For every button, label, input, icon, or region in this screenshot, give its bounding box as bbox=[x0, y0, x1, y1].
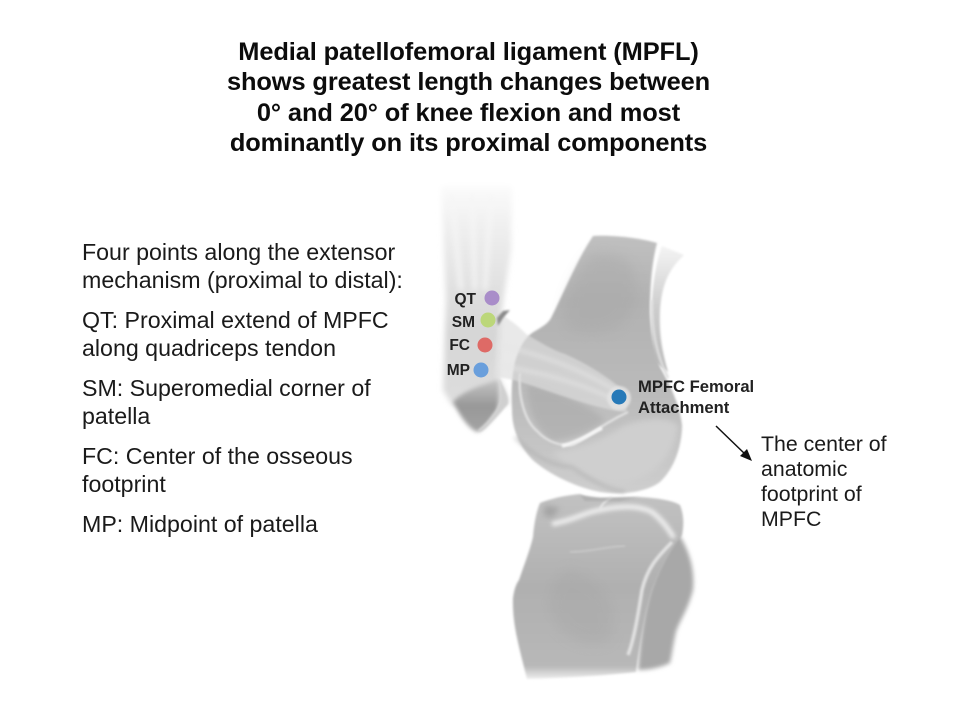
arrow bbox=[716, 426, 752, 461]
title: Medial patellofemoral ligament (MPFL) bbox=[238, 38, 699, 66]
point: femoral attachment bbox=[612, 390, 626, 404]
text: introduction: Four points along the extensor bbox=[82, 239, 395, 265]
title bbox=[227, 38, 710, 157]
text: footprint note: footprint of bbox=[761, 482, 862, 506]
text: FC definition: FC: Center of the osseous bbox=[82, 443, 353, 469]
point: SM bbox=[452, 312, 496, 331]
point: FC: FC bbox=[449, 337, 470, 354]
tibia bbox=[513, 494, 683, 679]
quadriceps tendon bbox=[441, 186, 512, 412]
patella bbox=[453, 376, 508, 432]
text: footprint note bbox=[761, 432, 887, 531]
text: introduction bbox=[82, 239, 403, 293]
text: MP definition: MP: Midpoint of patella bbox=[82, 511, 318, 537]
point: QT bbox=[454, 290, 500, 308]
femur bbox=[512, 236, 682, 493]
title: dominantly on its proximal components bbox=[230, 129, 707, 157]
text: SM definition: SM: Superomedial corner of bbox=[82, 375, 371, 401]
point: MP bbox=[447, 362, 488, 379]
text: QT definition: along quadriceps tendon bbox=[82, 335, 336, 361]
label: femoral attachment: Attachment bbox=[638, 398, 730, 417]
text: footprint note: anatomic bbox=[761, 457, 847, 481]
text: footprint note: The center of bbox=[761, 432, 886, 456]
point: MP: MP bbox=[447, 362, 470, 379]
text: SM definition bbox=[82, 375, 371, 429]
title: shows greatest length changes between bbox=[227, 68, 710, 96]
text: FC definition: footprint bbox=[82, 471, 166, 497]
text: footprint note: MPFC bbox=[761, 507, 821, 531]
text: QT definition bbox=[82, 307, 389, 361]
title: 0° and 20° of knee flexion and most bbox=[257, 99, 680, 127]
point: QT: QT bbox=[454, 291, 477, 308]
point: FC bbox=[449, 337, 492, 354]
posterior femoral strip bbox=[652, 246, 684, 372]
text: introduction: mechanism (proximal to distal): bbox=[82, 267, 403, 293]
medial patellofemoral ligament bbox=[495, 310, 631, 412]
text: FC definition bbox=[82, 443, 353, 497]
label: femoral attachment: MPFC Femoral bbox=[638, 377, 754, 396]
point: SM: SM bbox=[452, 314, 475, 331]
text: SM definition: patella bbox=[82, 403, 150, 429]
tibia fibular side bbox=[638, 530, 693, 670]
text: QT definition: QT: Proximal extend of MPFC bbox=[82, 307, 389, 333]
